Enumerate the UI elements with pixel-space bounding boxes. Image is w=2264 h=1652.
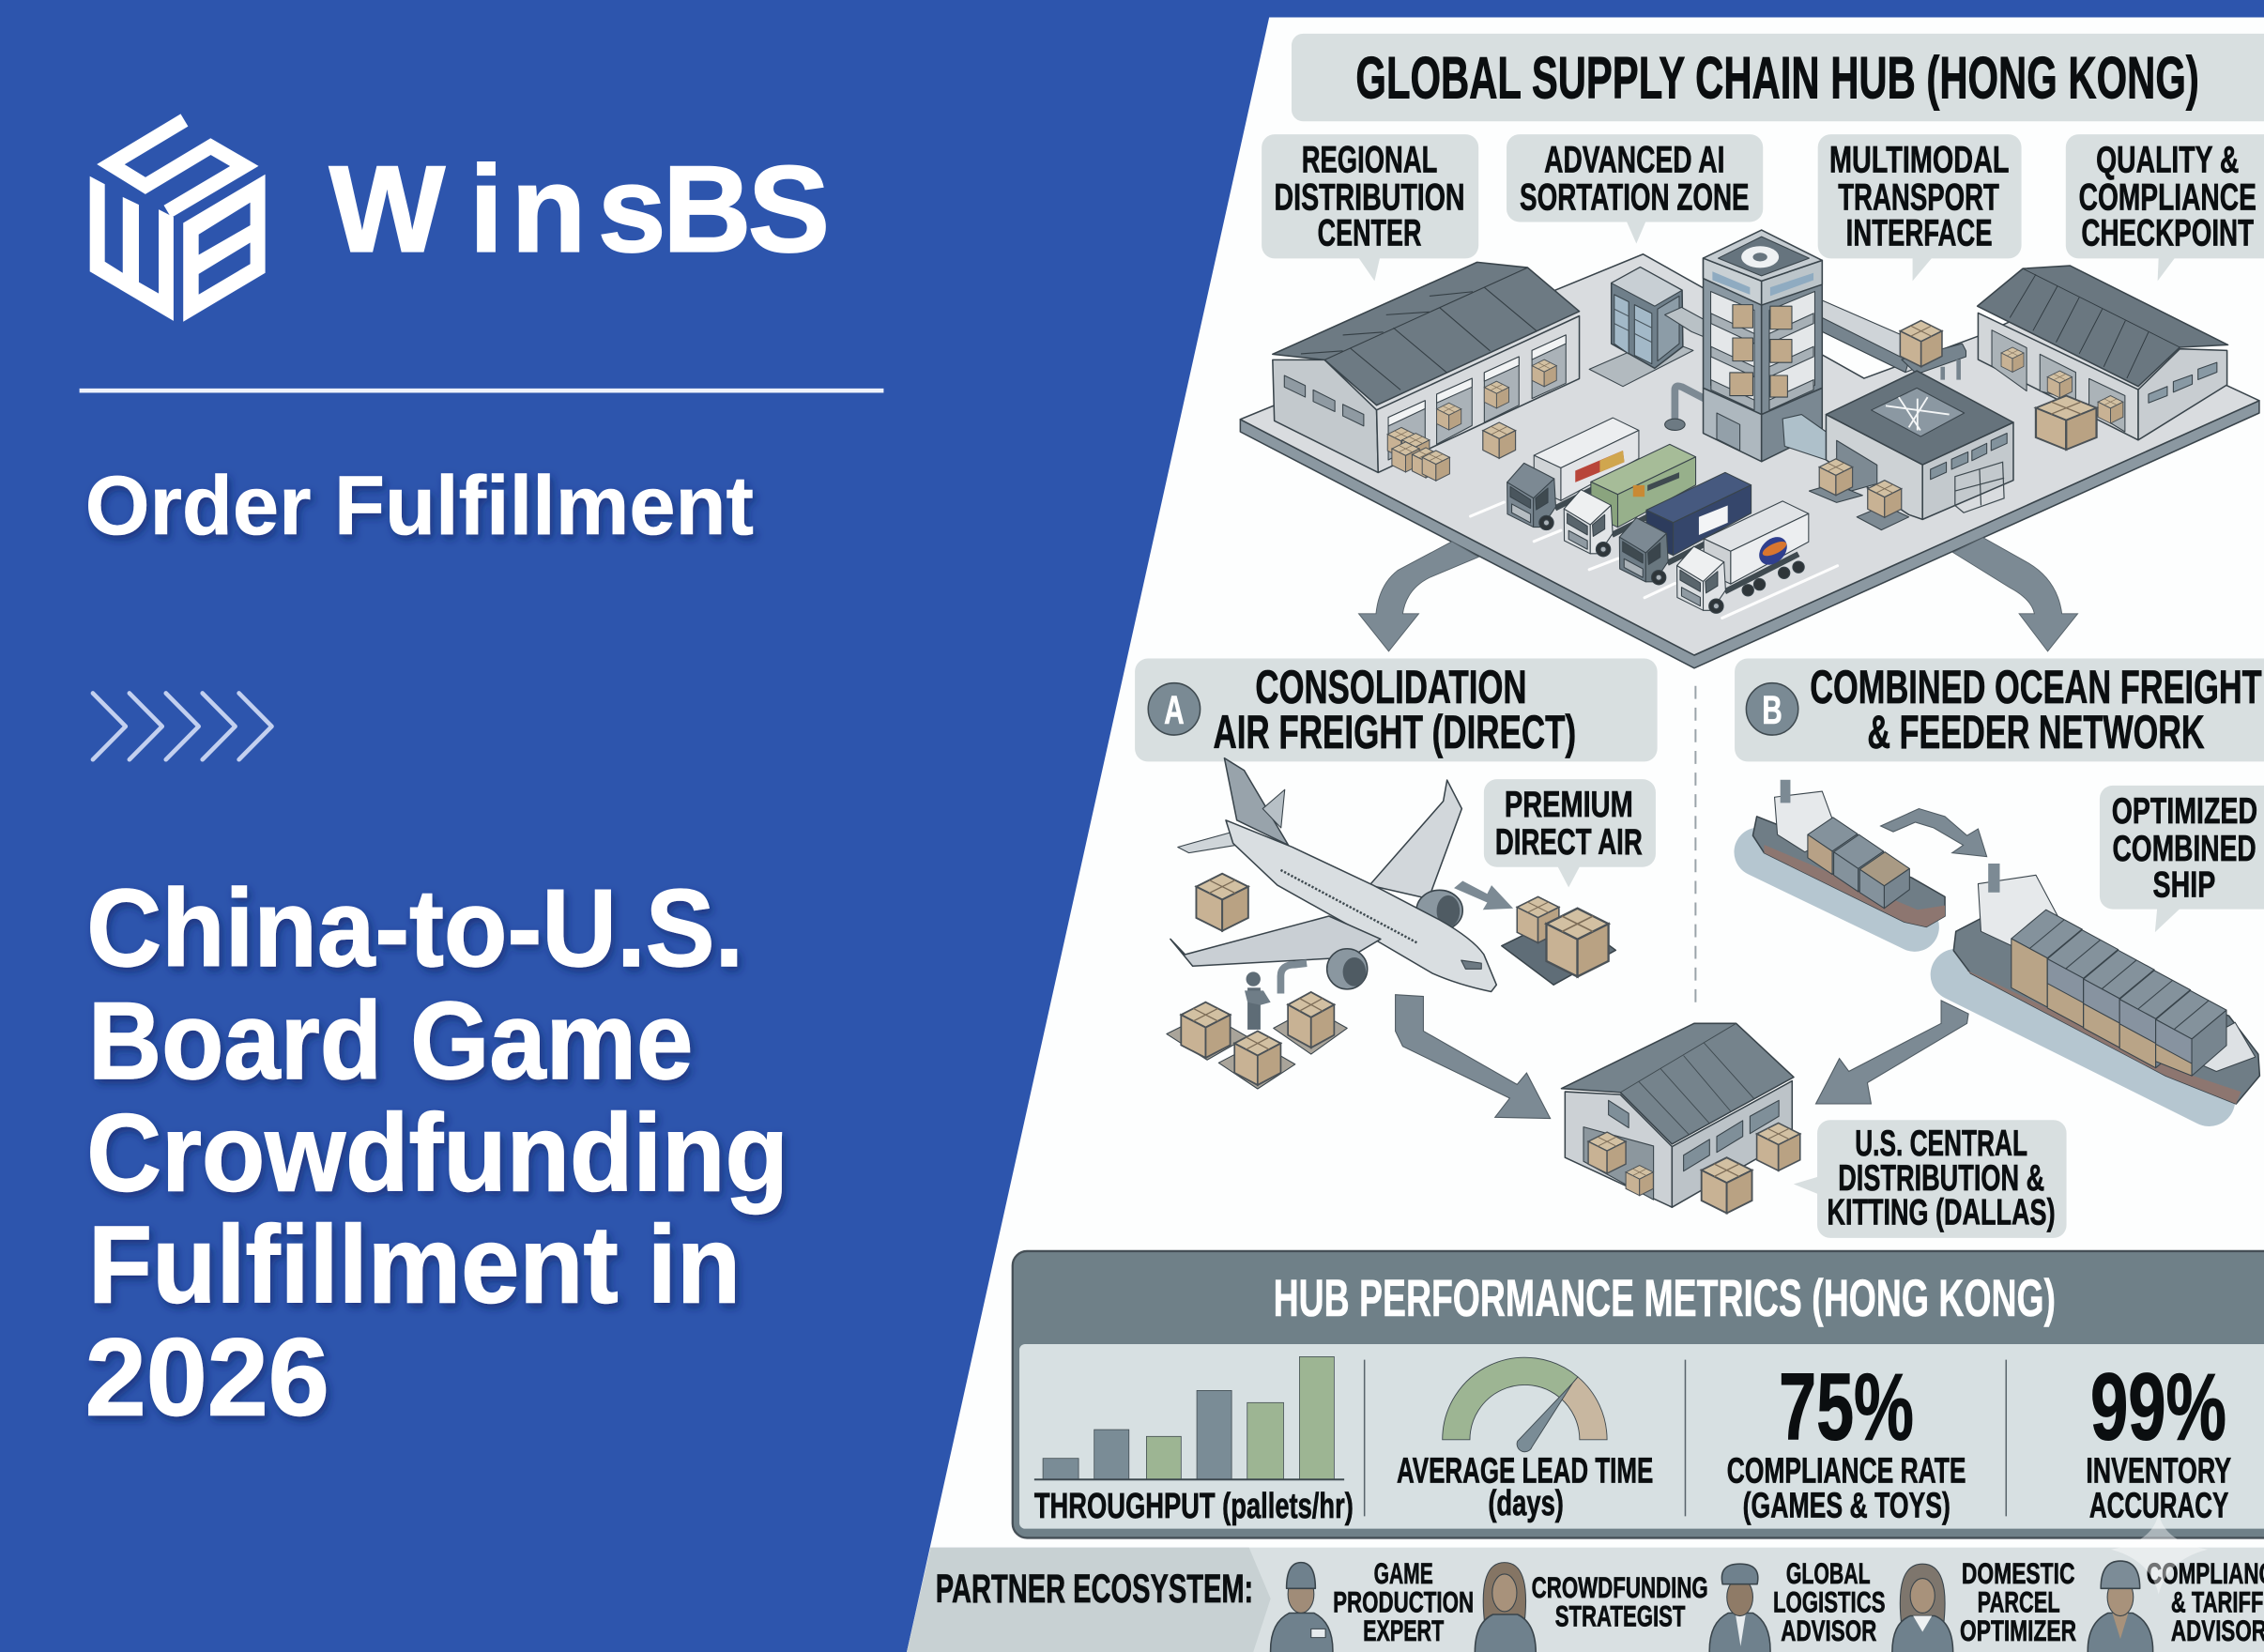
bar chart: throughput bbox=[1034, 1356, 1354, 1525]
callout: U.S. central distribution and kitting: KITTING (DALLAS) bbox=[1828, 1193, 2056, 1233]
partner: domestic parcel optimizer: OPTIMIZER bbox=[1960, 1614, 2076, 1647]
callout: advanced AI sortation zone: SORTATION ZONE bbox=[1520, 177, 1750, 219]
arrow: to air freight bbox=[1359, 542, 1478, 651]
callout: premium direct air: DIRECT AIR bbox=[1495, 822, 1643, 863]
lane markings bbox=[1471, 502, 1838, 618]
truck 4 bbox=[1677, 501, 1809, 613]
arrow: air freight to Dallas bbox=[1396, 995, 1551, 1119]
callout: U.S. central distribution and kitting: U.S. CENTRAL bbox=[1855, 1124, 2027, 1164]
partner label tab bbox=[907, 1548, 1271, 1652]
callout: U.S. central distribution and kitting bbox=[1794, 1120, 2067, 1238]
cargo being loaded on the plane bbox=[1167, 874, 1615, 1089]
partner: global logistics advisor bbox=[1709, 1556, 1886, 1652]
partner: game production expert: EXPERT bbox=[1363, 1614, 1444, 1647]
small consolidation warehouse bbox=[1809, 371, 2013, 530]
callout: quality and compliance checkpoint bbox=[2066, 134, 2264, 281]
panel: partner ecosystem strip bbox=[907, 1548, 2264, 1652]
panel heading A: consolidation air freight: CONSOLIDATION bbox=[1255, 660, 1527, 713]
isometric hub illustration bbox=[1240, 230, 2259, 668]
truck 3 bbox=[1619, 472, 1752, 585]
callout: regional distribution center: REGIONAL bbox=[1302, 140, 1437, 181]
callout: advanced AI sortation zone bbox=[1507, 134, 1763, 244]
illustration: combined container ship bbox=[1953, 864, 2259, 1104]
panel heading B: combined ocean freight bbox=[1735, 659, 2264, 761]
main title bbox=[85, 866, 788, 1439]
main title: Crowdfunding bbox=[86, 1091, 788, 1214]
compliance warehouse bbox=[1978, 266, 2228, 450]
route divider bbox=[1694, 686, 1696, 1009]
partner heading: PARTNER ECOSYSTEM: bbox=[936, 1567, 1253, 1611]
callout: optimized combined ship: SHIP bbox=[2153, 865, 2215, 906]
metric: compliance rate 75%: 75% bbox=[1779, 1354, 1914, 1461]
partner: domestic parcel optimizer: PARCEL bbox=[1978, 1585, 2060, 1619]
panel heading A: consolidation air freight bbox=[1135, 659, 1658, 761]
divider rule bbox=[80, 389, 883, 392]
partner: game production expert: PRODUCTION bbox=[1333, 1585, 1474, 1619]
white content panel bbox=[907, 17, 2264, 1652]
truck 2 bbox=[1564, 444, 1696, 557]
partner: game production expert bbox=[1271, 1556, 1474, 1652]
metric: compliance rate 75%: (GAMES & TOYS) bbox=[1743, 1485, 1950, 1524]
metric: compliance rate 75%: COMPLIANCE RATE bbox=[1727, 1451, 1966, 1491]
conveyor to multimodal interface bbox=[1822, 300, 1966, 380]
panel heading A: consolidation air freight: AIR FREIGHT (DIRECT) bbox=[1213, 705, 1576, 758]
partner: global logistics advisor: ADVISOR bbox=[1781, 1614, 1876, 1647]
gauge: average lead time: AVERAGE LEAD TIME bbox=[1397, 1451, 1653, 1491]
arrow: to ocean freight bbox=[1953, 538, 2078, 651]
partner: global logistics advisor: GLOBAL bbox=[1786, 1556, 1871, 1590]
partner: domestic parcel optimizer bbox=[1892, 1556, 2076, 1652]
bar chart: throughput: THROUGHPUT (pallets/hr) bbox=[1034, 1486, 1354, 1525]
partner: crowdfunding strategist: STRATEGIST bbox=[1555, 1599, 1685, 1633]
main title: Board Game bbox=[88, 979, 693, 1102]
brand name: WinsBS bbox=[329, 141, 830, 278]
illustration: feeder ship bbox=[1752, 780, 1945, 927]
partner: game production expert: GAME bbox=[1374, 1556, 1433, 1590]
main title: Fulfillment in bbox=[88, 1203, 741, 1326]
callout: multimodal transport interface bbox=[1818, 134, 2022, 281]
callout: premium direct air: PREMIUM bbox=[1505, 785, 1633, 825]
truck 1 bbox=[1507, 418, 1639, 530]
partner: crowdfunding strategist: CROWDFUNDING bbox=[1532, 1570, 1708, 1604]
arrow: ocean freight to Dallas bbox=[1816, 1001, 1968, 1104]
hub platform bbox=[1240, 254, 2259, 668]
regional distribution warehouse bbox=[1273, 262, 1580, 472]
left column: branding and title bbox=[80, 120, 883, 1439]
partner: domestic parcel optimizer: DOMESTIC bbox=[1962, 1556, 2074, 1590]
sparkle watermark bbox=[2111, 1513, 2208, 1594]
gauge: average lead time: (days) bbox=[1488, 1483, 1564, 1522]
central tower bbox=[1704, 230, 1826, 462]
callout: multimodal transport interface: INTERFACE bbox=[1846, 213, 1993, 254]
warehouse cartons bbox=[1387, 359, 1556, 481]
callout: regional distribution center bbox=[1262, 134, 1478, 281]
metric: compliance rate 75% bbox=[1727, 1354, 1966, 1524]
panel heading B: combined ocean freight: B bbox=[1762, 688, 1782, 733]
partner: crowdfunding strategist bbox=[1475, 1563, 1708, 1652]
metric: inventory accuracy 99% bbox=[2086, 1354, 2231, 1524]
panel heading A: consolidation air freight: A bbox=[1164, 688, 1185, 733]
callout: multimodal transport interface: MULTIMODAL bbox=[1829, 140, 2009, 181]
callout: regional distribution center: DISTRIBUTION bbox=[1275, 177, 1465, 219]
arrow: feeder to main ship bbox=[1881, 809, 1987, 857]
callout: advanced AI sortation zone: ADVANCED AI bbox=[1544, 140, 1724, 181]
panel: hub performance metrics bbox=[1013, 1251, 2264, 1537]
illustration: Dallas distribution warehouse bbox=[1561, 1023, 1800, 1213]
callout: regional distribution center: CENTER bbox=[1318, 213, 1422, 254]
AI sortation machine bbox=[1589, 268, 1715, 430]
callout: optimized combined ship bbox=[2100, 786, 2264, 932]
main title: 2026 bbox=[85, 1316, 329, 1439]
icon: WinsBS cube logo bbox=[90, 120, 266, 322]
icon: chevrons bbox=[93, 693, 272, 759]
main title: China-to-U.S. bbox=[86, 866, 743, 989]
subheading: Order Fulfillment bbox=[85, 458, 754, 552]
partner: compliance and tariff advisor bbox=[2088, 1556, 2264, 1652]
metrics body bbox=[1019, 1344, 2264, 1529]
callout: multimodal transport interface: TRANSPORT bbox=[1838, 177, 1999, 219]
gauge: average lead time bbox=[1397, 1357, 1653, 1522]
partner: global logistics advisor: LOGISTICS bbox=[1773, 1585, 1886, 1619]
illustration: airplane bbox=[1170, 758, 1496, 991]
callout: premium direct air bbox=[1484, 779, 1656, 887]
callout: U.S. central distribution and kitting: DISTRIBUTION & bbox=[1838, 1158, 2044, 1199]
